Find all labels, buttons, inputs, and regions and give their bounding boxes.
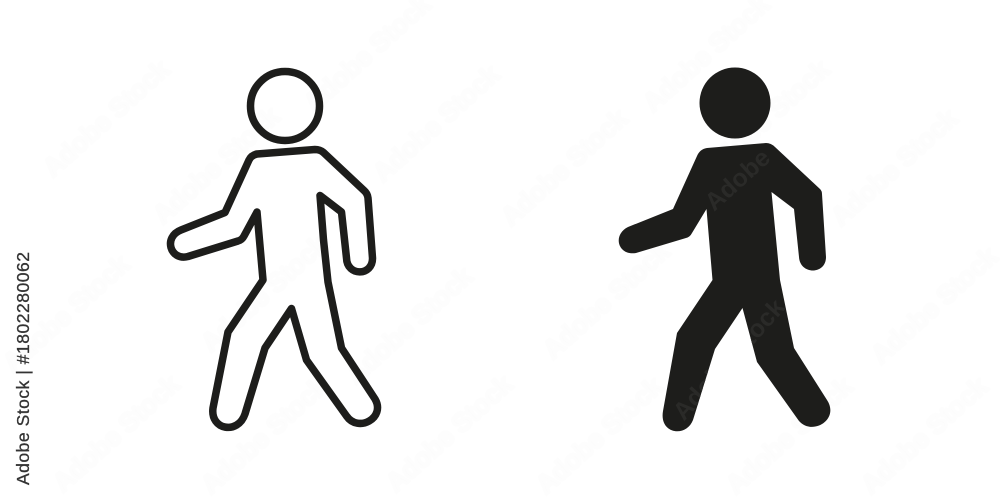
watermark pattern: Adobe Stock	[865, 241, 1000, 370]
watermark pattern: Adobe Stock	[380, 369, 518, 498]
watermark on solid figure: Adobe Stock	[668, 293, 791, 426]
solid body	[619, 143, 830, 431]
watermark pattern: Adobe Stock	[367, 59, 505, 188]
watermark pattern: Adobe Stock	[537, 236, 675, 365]
solid head	[700, 68, 770, 138]
watermark pattern: Adobe Stock	[530, 371, 668, 500]
stock id caption: Adobe Stock | #1802280062	[13, 252, 33, 485]
watermark pattern: Adobe Stock	[855, 371, 993, 500]
watermark pattern: Adobe Stock	[195, 371, 333, 500]
watermark pattern: Adobe Stock	[47, 369, 185, 498]
illustration canvas	[16, 68, 830, 486]
outline head	[250, 72, 320, 140]
watermark pattern: Adobe Stock	[340, 261, 478, 390]
watermark pattern: Adobe Stock	[495, 103, 633, 232]
watermark pattern: Adobe Stock	[720, 371, 858, 500]
outline body	[171, 150, 378, 427]
watermark pattern: Adobe Stock	[825, 103, 963, 232]
watermark pattern: Adobe Stock	[697, 54, 835, 183]
icon: outline walking person	[171, 72, 378, 427]
watermark pattern: Adobe Stock	[0, 249, 135, 378]
icon: solid walking person	[619, 68, 830, 431]
watermark pattern: Adobe Stock	[195, 229, 333, 358]
watermark pattern: Adobe Stock	[147, 101, 285, 230]
watermark on solid figure: Adobe	[699, 144, 776, 216]
watermark pattern: Adobe Stock	[37, 54, 175, 183]
watermark on solid figure	[676, 153, 786, 421]
